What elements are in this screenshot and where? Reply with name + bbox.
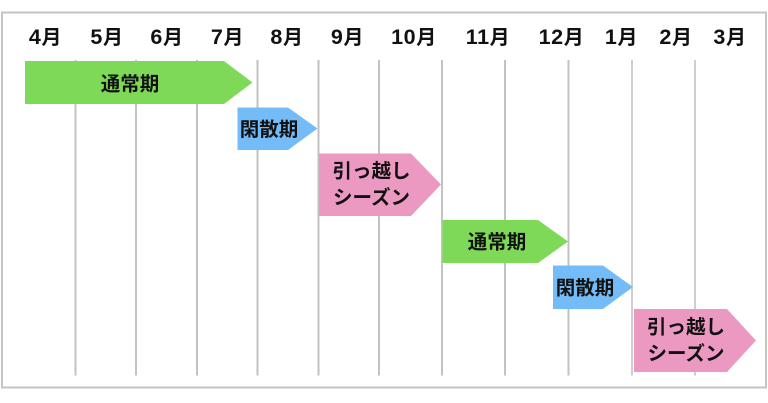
month labels: 12月 <box>539 25 584 49</box>
arrow: 通常期 November <box>442 220 568 263</box>
month labels: 7月 <box>211 25 244 49</box>
arrow: 閑散期 August <box>238 108 318 150</box>
arrow: 通常期 November: 通常期 <box>468 232 526 254</box>
month labels: 4月 <box>29 25 62 49</box>
month labels <box>29 25 747 49</box>
arrow: 通常期 April to July <box>25 61 252 104</box>
arrow: 引っ越しシーズン September to October <box>319 154 441 216</box>
arrow: 閑散期 December <box>553 266 633 309</box>
month labels: 3月 <box>713 25 747 49</box>
arrow: 閑散期 August: 閑散期 <box>240 119 298 141</box>
month labels: 8月 <box>270 25 304 49</box>
arrow: 引っ越しシーズン September to October: シーズン <box>333 186 410 209</box>
arrow: 引っ越しシーズン January to March: 引っ越し <box>647 316 725 338</box>
month gridlines <box>76 60 695 376</box>
month labels: 6月 <box>150 25 184 49</box>
month labels: 5月 <box>90 25 124 49</box>
arrow: 閑散期 December: 閑散期 <box>556 278 614 300</box>
month labels: 9月 <box>331 25 364 49</box>
arrow: 引っ越しシーズン January to March <box>634 309 756 372</box>
month labels: 2月 <box>659 25 693 49</box>
month labels: 11月 <box>466 25 510 49</box>
arrow: 引っ越しシーズン January to March: シーズン <box>647 342 725 365</box>
month labels: 1月 <box>605 25 638 49</box>
arrow: 通常期 April to July: 通常期 <box>101 74 159 96</box>
month labels: 10月 <box>391 25 437 49</box>
arrow: 引っ越しシーズン September to October: 引っ越し <box>332 160 411 182</box>
